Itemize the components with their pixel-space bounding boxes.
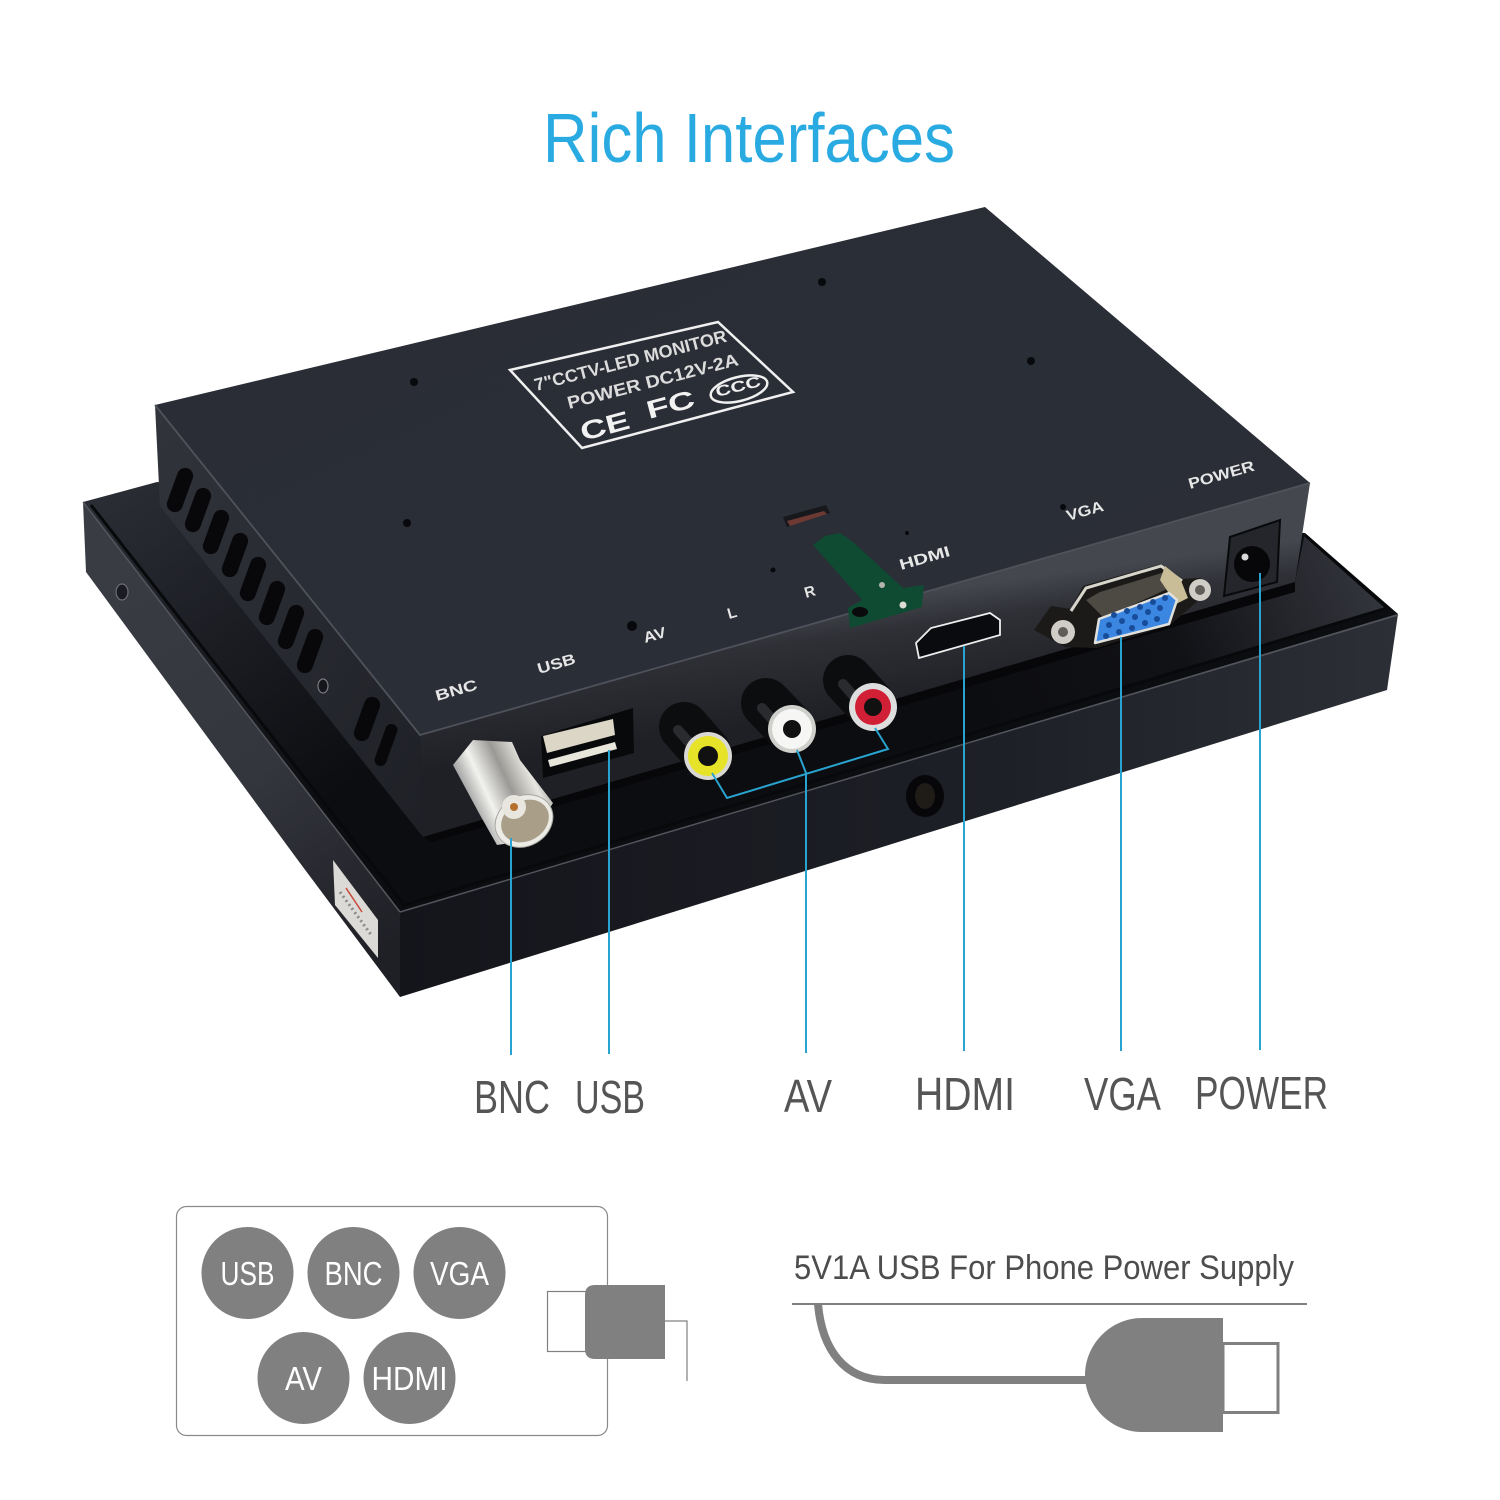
printed port labels: AV bbox=[641, 624, 668, 647]
port name labels bbox=[474, 1067, 1328, 1123]
red RCA bbox=[843, 680, 897, 731]
port name labels: AV bbox=[784, 1070, 832, 1122]
BNC badge: BNC bbox=[324, 1255, 382, 1292]
panel: multi-input adapter diagram bbox=[176, 1206, 687, 1436]
USB leader bbox=[608, 750, 610, 1054]
ventilation slots bbox=[165, 466, 399, 768]
VGA badge: VGA bbox=[430, 1255, 489, 1292]
adapter plug bbox=[548, 1285, 687, 1381]
warranty sticker bbox=[333, 860, 378, 958]
green circuit board bbox=[813, 533, 924, 628]
title: Rich Interfaces bbox=[543, 99, 955, 177]
USB cable bbox=[818, 1304, 1095, 1380]
spec plate: FC bbox=[643, 385, 698, 425]
side screw bbox=[318, 679, 328, 693]
BNC badge bbox=[308, 1227, 400, 1319]
callout lines bbox=[511, 573, 1260, 1055]
white RCA bbox=[762, 703, 816, 753]
AV leader bbox=[797, 750, 806, 1053]
USB badge bbox=[202, 1227, 294, 1319]
printed port labels: VGA bbox=[1064, 498, 1106, 525]
VGA badge bbox=[414, 1227, 506, 1319]
spec plate bbox=[510, 322, 793, 448]
printed port labels bbox=[433, 458, 1257, 705]
panel: USB phone power supply bbox=[792, 1249, 1307, 1432]
caption rule bbox=[792, 1303, 1307, 1305]
printed port labels: R bbox=[802, 582, 818, 602]
spec plate: CE bbox=[577, 405, 633, 447]
port name labels: BNC bbox=[474, 1071, 550, 1123]
caption: 5V1A USB For Phone Power Supply bbox=[794, 1249, 1294, 1287]
VGA port bbox=[1034, 564, 1212, 648]
printed port labels: POWER bbox=[1186, 458, 1257, 493]
USB port bbox=[541, 708, 634, 778]
spec plate: CCC bbox=[714, 373, 763, 401]
red indicator slot bbox=[783, 505, 830, 527]
printed port labels: BNC bbox=[433, 677, 480, 705]
rear housing bbox=[155, 207, 1310, 842]
HDMI port bbox=[916, 613, 1000, 658]
AV bracket bbox=[712, 728, 888, 798]
mounting holes bbox=[403, 278, 1066, 631]
USB plug bbox=[1085, 1318, 1278, 1432]
USB badge: USB bbox=[220, 1255, 274, 1292]
HDMI leader bbox=[963, 646, 965, 1051]
printed port labels: USB bbox=[535, 651, 578, 678]
power leader bbox=[1259, 573, 1261, 1050]
monitor photo bbox=[83, 207, 1398, 997]
printed port labels: HDMI bbox=[897, 543, 952, 574]
bezel screw bbox=[116, 584, 128, 600]
power jack bbox=[1224, 520, 1280, 596]
port name labels: HDMI bbox=[915, 1068, 1015, 1120]
spec plate: POWER DC12V-2A bbox=[565, 349, 741, 413]
HDMI badge: HDMI bbox=[372, 1360, 448, 1397]
AV badge: AV bbox=[285, 1360, 322, 1397]
yellow RCA bbox=[678, 727, 732, 780]
HDMI badge bbox=[364, 1332, 456, 1424]
spec plate: 7"CCTV-LED MONITOR bbox=[532, 326, 729, 395]
port name labels: USB bbox=[575, 1071, 645, 1123]
tripod mount hole bbox=[906, 775, 944, 817]
panel outline bbox=[176, 1206, 608, 1436]
BNC connector bbox=[453, 740, 562, 858]
bezel frame bbox=[83, 482, 1398, 997]
port name labels: VGA bbox=[1084, 1068, 1161, 1120]
VGA leader bbox=[1120, 637, 1122, 1051]
printed port labels: L bbox=[725, 604, 739, 623]
port name labels: POWER bbox=[1195, 1067, 1328, 1119]
AV badge bbox=[258, 1332, 350, 1424]
BNC leader bbox=[510, 838, 512, 1055]
